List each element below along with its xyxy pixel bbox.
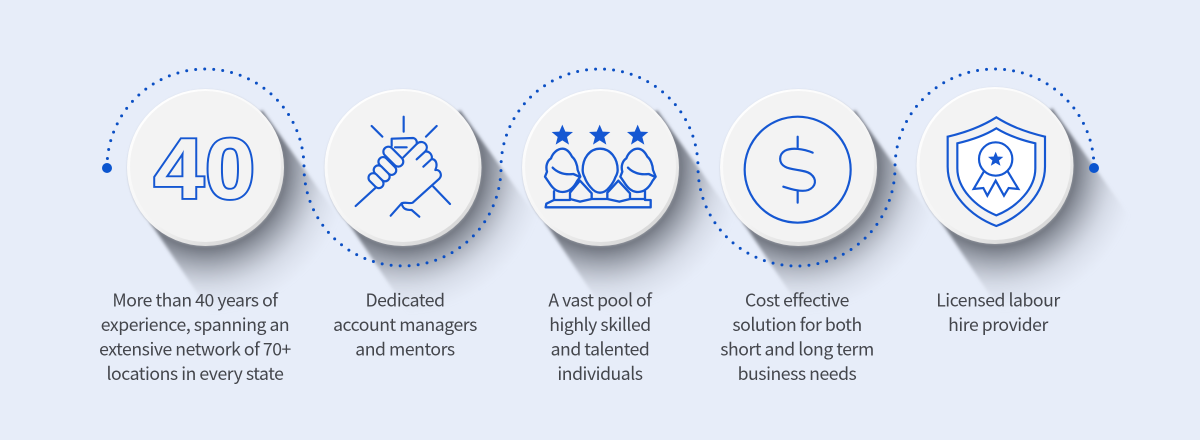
circle 3 — [522, 89, 679, 246]
right head — [620, 149, 656, 192]
centre head — [583, 149, 618, 193]
caption 1: locations in every state — [106, 361, 284, 386]
caption 1 — [99, 288, 292, 386]
icon: number 40 outline: 40 — [154, 121, 256, 216]
caption 3: and talented — [551, 336, 649, 362]
caption 2 — [333, 288, 477, 362]
caption 2: and mentors — [355, 336, 455, 362]
item 4: cost effective — [720, 89, 877, 386]
path end dot — [1089, 163, 1099, 173]
caption 2: Dedicated — [365, 288, 445, 312]
caption 3: highly skilled — [549, 312, 651, 337]
left head — [545, 149, 580, 192]
caption 1: More than 40 years of — [112, 288, 279, 312]
fingers of left fist — [367, 145, 405, 190]
caption 4: business needs — [738, 361, 857, 386]
item 3: talent pool — [522, 89, 679, 386]
circle 2 — [324, 89, 482, 246]
caption 4: solution for both — [732, 312, 862, 337]
icon: shield with award ribbon — [948, 117, 1045, 226]
item 2: handshake — [324, 89, 482, 362]
item 1: 40 years — [99, 89, 292, 386]
caption 4: Cost effective — [745, 288, 849, 312]
circle 5 — [916, 87, 1074, 244]
caption 5: hire provider — [948, 312, 1048, 337]
caption 3: individuals — [557, 361, 643, 386]
caption 5: Licensed labour — [936, 288, 1060, 312]
caption 1: extensive network of 70+ — [99, 336, 292, 362]
caption 3: A vast pool of — [548, 288, 653, 312]
path start dot — [102, 163, 112, 173]
caption 4 — [720, 288, 874, 386]
icon: clasped hands — [356, 117, 450, 217]
caption 5 — [936, 288, 1060, 337]
dotted connector path — [107, 69, 1094, 266]
caption 3 — [548, 288, 653, 386]
icon: three people with stars — [545, 125, 656, 207]
long shadows — [150, 108, 1145, 320]
circle 4 — [720, 89, 877, 246]
circle 1 — [127, 89, 284, 246]
caption 4: short and long term — [720, 336, 874, 362]
caption 1: experience, spanning an — [101, 312, 289, 337]
caption 2: account managers — [333, 312, 477, 337]
base and collars — [546, 191, 651, 207]
item 5: licensed — [916, 87, 1074, 337]
stars — [552, 125, 648, 145]
icon: dollar coin — [745, 117, 851, 223]
